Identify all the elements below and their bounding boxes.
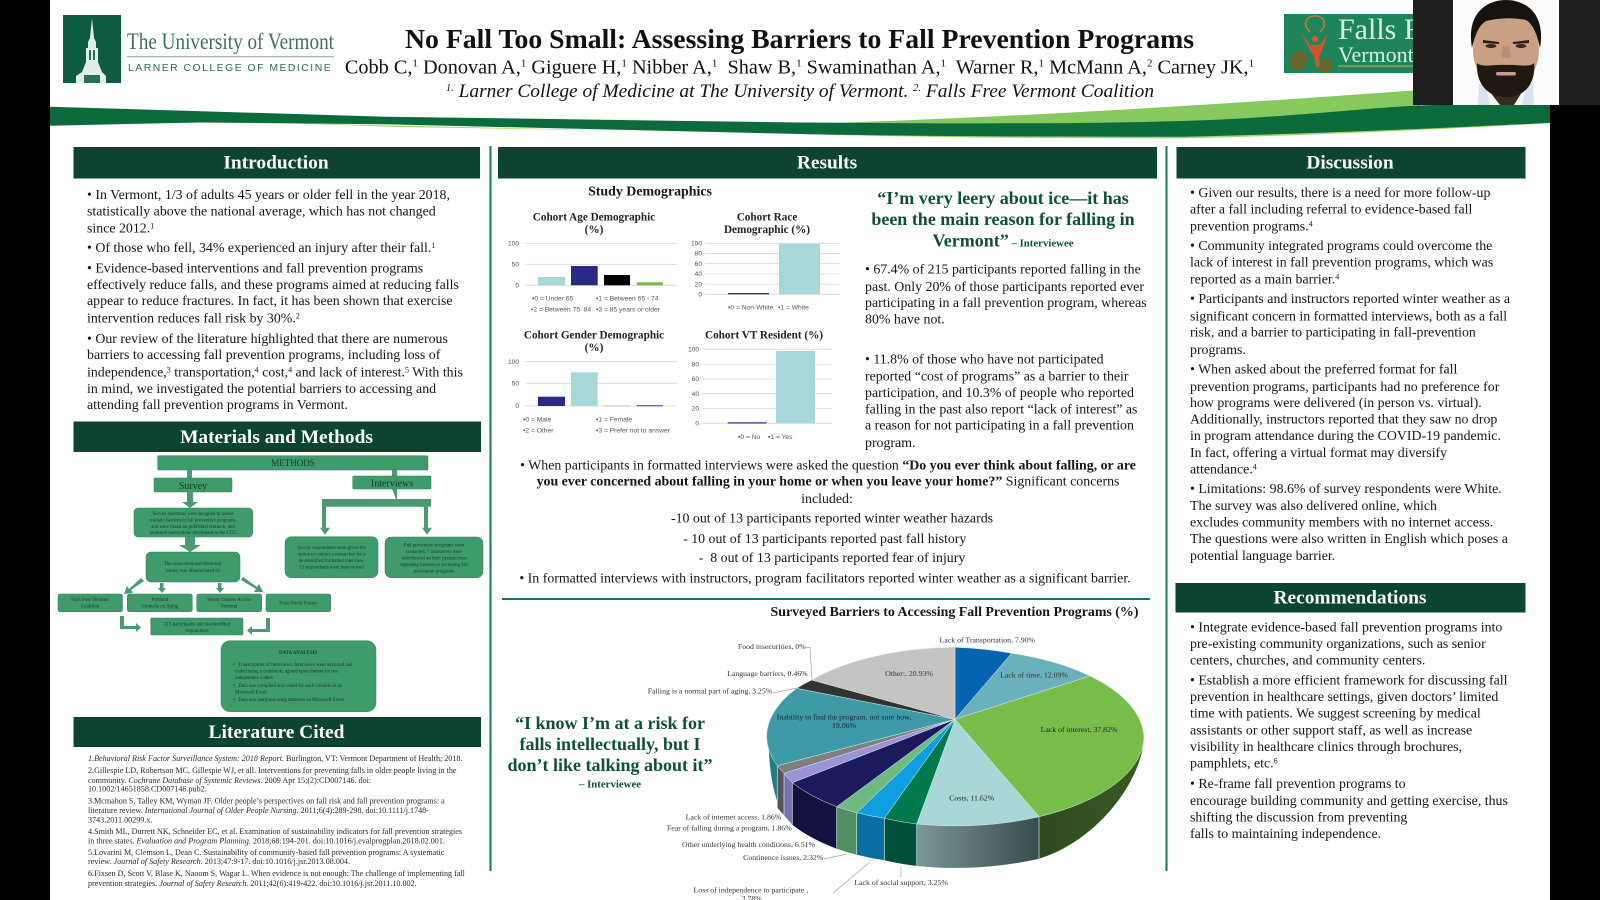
text block: references: in three states. Evaluation and Program Planning. 2018;68:194-201. doi:10.1016/j.evalprogplan.2018.02.001.: [88, 836, 445, 846]
chart: cohort race demographic: ▪1 = White: [778, 304, 809, 312]
text block: introduction: cost,: [259, 366, 288, 380]
authors: 1: [1249, 58, 1254, 70]
text block: recommendations: pre-existing community organizations, such as senior: [1190, 637, 1486, 652]
chart: cohort VT resident: [688, 330, 832, 441]
heading: results: [498, 147, 1157, 178]
text block: survey findings: past. Only 20% of those participants reported ever: [865, 280, 1144, 295]
flowchart: methods: Survey: [179, 481, 207, 492]
flowchart: methods: Fall prevention programs were: [404, 544, 464, 548]
pie labels: Lack of interest, 37.82%: [1041, 725, 1118, 734]
text block: discussion: [1190, 186, 1510, 564]
text block: survey findings: a reason for not participating in a fall prevention: [865, 419, 1134, 434]
text block: discussion: potential language barrier.: [1190, 549, 1335, 564]
flowchart: methods: • Data was analyzed using statistics on Microsoft Excel: [233, 698, 345, 703]
flowchart: methods: DATA ANALYSIS: [279, 651, 317, 656]
heading: results: Results: [797, 152, 858, 174]
chart: cohort race demographic: Cohort Race: [737, 212, 797, 224]
callout: intellectual risk quote: [507, 713, 713, 790]
authors: 1: [796, 58, 802, 70]
chart: cohort race demographic: Demographic (%): [724, 224, 810, 236]
text block: recommendations: 6: [1274, 756, 1278, 765]
authors: 1: [412, 58, 418, 70]
chart: cohort age demographic: 0: [515, 282, 519, 290]
text block: survey findings: • 67.4% of 215 participants reported falling in the: [865, 262, 1141, 278]
flowchart: methods: de-identified formatted interview.: [299, 559, 364, 564]
text block: introduction: in mind, we investigated the potential barriers to accessing and: [87, 382, 436, 397]
chart: cohort age demographic: (%): [585, 224, 604, 236]
text block: references: 3.Mcmahon S, Talley KM, Wyman JF. Older people’s perspectives on fall risk and fall prevention programs: a: [88, 796, 445, 806]
text block: discussion: programs.: [1190, 343, 1246, 358]
text block: discussion: The survey was also delivered online, which: [1190, 499, 1437, 514]
text block: introduction: 5: [405, 366, 409, 374]
chart: cohort race demographic: 20: [695, 281, 702, 288]
chart: cohort race demographic: 80: [695, 251, 702, 258]
pie side walls: [767, 737, 1144, 868]
text block: formatted interviews: -10 out of 13 participants reported winter weather hazards: [671, 511, 993, 526]
affiliations: Falls Free Vermont Coalition: [921, 81, 1154, 102]
affiliations: 1.: [446, 83, 454, 94]
chart: cohort VT resident: 40: [692, 391, 699, 398]
text block: survey findings: program.: [865, 436, 915, 451]
flowchart: methods: Portland: [152, 598, 169, 603]
webcam overlay: presenter photo: [1413, 0, 1600, 105]
chart: cohort age demographic: ▪1 = Between 65 - 74: [596, 296, 659, 302]
pie labels: Lack of time, 12.09%: [1000, 670, 1068, 680]
text block: discussion: significant concern in formatted interviews, both as a fall: [1190, 309, 1507, 324]
text block: references: community. Cochrane Database of Systemic Reviews. 2009 Apr 15;(2):CD007146. doi:: [88, 776, 371, 785]
chart: cohort VT resident: 0: [695, 420, 699, 428]
chart: cohort age demographic: 100: [508, 240, 519, 248]
heading: introduction: [74, 147, 480, 178]
pie labels: Other:, 20.93%: [885, 669, 933, 678]
callout: ice quote: been the main reason for falling in: [871, 209, 1135, 229]
text block: introduction: • In Vermont, 1/3 of adults 45 years or older fell in the year 2018,: [87, 188, 450, 203]
flowchart: methods: Vermont: [221, 604, 238, 610]
text block: discussion: • Limitations: 98.6% of survey respondents were White.: [1190, 482, 1502, 497]
authors: Swaminathan A,: [802, 56, 941, 78]
text block: formatted interviews: - 10 out of 13 participants reported past fall history: [680, 532, 966, 547]
flowchart: methods: interviewed on their perspectives: [402, 556, 466, 562]
text block: discussion: how programs were delivered (in person vs. virtual).: [1190, 396, 1482, 411]
text block: introduction: • Evidence-based interventions and fall prevention programs: [87, 261, 423, 276]
text block: recommendations: encourage building community and getting exercise, thus: [1190, 794, 1508, 809]
callout: intellectual risk quote: – Interviewee: [578, 778, 641, 790]
heading: literature cited: [74, 717, 481, 747]
text block: survey findings: falling in the past also report “lack of interest” as: [865, 402, 1137, 417]
authors: Warner R,: [946, 56, 1038, 78]
text block: introduction: [87, 188, 463, 413]
chart: cohort age demographic: ▪2 = Between 75 84: [531, 306, 591, 314]
authors: Giguere H,: [526, 56, 621, 78]
text block: introduction: 1: [150, 222, 154, 231]
text block: discussion: • When asked about the preferred format for fall: [1190, 362, 1457, 378]
chart: cohort race demographic: [691, 212, 840, 312]
heading: recommendations: Recommendations: [1274, 588, 1427, 608]
text block: introduction: intervention reduces fall risk by 30%.: [87, 311, 296, 326]
text block: references: prevention strategies. Journal of Safety Research. 2011;42(6):419-422. doi:10.1016/j.jsr.2011.10.002.: [88, 879, 417, 888]
text block: recommendations: shifting the discussion from preventing: [1190, 810, 1407, 825]
authors: McMann A,: [1044, 56, 1147, 78]
flowchart: methods: pretested instructions distributed to the CCC: [149, 531, 237, 536]
text block: formatted interviews: you ever concerned about falling in your home or when you leave your home?” Significant concerns: [537, 475, 1119, 490]
chart: cohort gender demographic: (%): [585, 342, 604, 354]
chart: cohort gender demographic: 50: [512, 380, 519, 388]
text block: introduction: • Our review of the literature highlighted that there are numerous: [87, 332, 448, 347]
heading: materials and methods: Materials and Methods: [180, 427, 373, 448]
text block: discussion: prevention programs, participants had no preference for: [1190, 380, 1500, 395]
chart: cohort race demographic: ▪0 = Non-White: [728, 304, 774, 312]
authors: Cobb C,: [345, 56, 412, 78]
flowchart: methods: 215 participants and de-identified: [164, 622, 230, 628]
text block: discussion: 4: [1309, 220, 1313, 229]
text block: references: 1.Behavioral Risk Factor Surveillance System: 2018 Report. Burlington, VT: Vermont Department of Health; 2018.: [88, 754, 462, 763]
text block: discussion: reported as a main barrier.: [1190, 273, 1335, 288]
chart: cohort race demographic: 40: [695, 271, 702, 278]
text block: discussion: 4: [1253, 462, 1257, 472]
text block: recommendations: [1190, 621, 1508, 842]
text block: references: 5.Lovarini M, Clemson L, Dean C. Sustainability of community-based fall prevention programs: A systematic: [88, 848, 445, 857]
heading: literature cited: Literature Cited: [209, 722, 345, 743]
callout: ice quote: “I’m very leery about ice—it has: [877, 188, 1129, 208]
text block: introduction: barriers to accessing fall prevention programs, including loss of: [87, 348, 441, 363]
heading: recommendations: [1176, 583, 1526, 612]
flowchart: methods: Survey respondents were given the: [297, 546, 366, 551]
authors: 1: [521, 58, 526, 70]
panel: results: [498, 147, 1157, 900]
chart: cohort VT resident: ▪1 = Yes: [768, 434, 793, 441]
flowchart: methods: [58, 456, 483, 712]
pie labels: Continence issues, 2.32%: [743, 853, 824, 862]
panel: introduction: [74, 147, 480, 413]
chart: cohort gender demographic: Cohort Gender Demographic: [524, 330, 664, 342]
text block: introduction: and lack of interest.: [292, 366, 405, 380]
flowchart: methods: Councils on Aging: [142, 604, 179, 610]
heading: discussion: [1176, 147, 1526, 178]
column dividers: [490, 146, 1168, 871]
text block: recommendations: prevention in healthcare settings, given doctors’ limited: [1190, 690, 1498, 705]
chart: cohort VT resident: 80: [692, 361, 699, 368]
chart: cohort age demographic: 50: [512, 262, 519, 268]
chart: cohort VT resident: ▪0 = No: [738, 434, 761, 441]
chart: cohort age demographic: [508, 212, 677, 314]
callout: intellectual risk quote: “I know I’m at a risk for: [515, 713, 705, 733]
text block: references: 10.1002/14651858.CD007146.pub2.: [88, 784, 207, 794]
pie labels: Food insecurities, 0%: [738, 642, 806, 651]
text block: references: 2.Gillespie LD, Robertson MC, Gillespie WJ, et all. Interventions for preventing falls in older people living in the: [88, 766, 457, 775]
heading: study demographics: Study Demographics: [588, 184, 713, 200]
authors: 1: [712, 58, 717, 70]
text block: introduction: attending fall prevention programs in Vermont.: [87, 398, 348, 413]
flowchart: methods: • Data was compiled and coded for each variable in an: [233, 684, 343, 689]
text block: introduction: since 2012.: [87, 222, 150, 237]
header swoosh: [50, 90, 1550, 138]
flowchart: methods: Interviews: [371, 478, 413, 490]
authors: 1: [1038, 58, 1044, 70]
text block: references: 3743.2011.00299.x.: [88, 816, 152, 824]
flowchart: methods: • Transcription of Interviews: Interviews were analyzed and: [233, 663, 353, 668]
text block: introduction: independence,: [87, 366, 167, 380]
text block: references: 4.Smith ML, Durrett NK, Schneider EC, et al. Examination of sustainability indicators for fall prevention strategies: [88, 827, 462, 836]
text block: introduction: transportation,: [171, 366, 255, 380]
pie labels: Lack of internet access, 1.86%: [686, 812, 782, 822]
pie labels: Lack of Transportation, 7.90%: [940, 636, 1036, 644]
text block: discussion: attendance.: [1190, 462, 1253, 478]
panel: materials and methods: [58, 422, 483, 712]
text block: discussion: The questions were also written in English which poses a: [1190, 532, 1508, 547]
text block: recommendations: • Establish a more efficient framework for discussing fall: [1190, 674, 1508, 689]
heading: discussion: Discussion: [1306, 152, 1394, 174]
text block: discussion: • Participants and instructors reported winter weather as a: [1190, 292, 1510, 307]
text block: formatted interviews: - 8 out of 13 participants reported fear of injury: [699, 551, 965, 566]
text block: survey findings: • 11.8% of those who have not participated: [865, 352, 1104, 367]
text block: recommendations: falls to maintaining independence.: [1190, 827, 1381, 842]
text block: discussion: • Given our results, there is a need for more follow-up: [1190, 186, 1490, 201]
text block: recommendations: • Integrate evidence-based fall prevention programs into: [1190, 621, 1502, 636]
text block: survey findings: 80% have not.: [865, 312, 945, 328]
chart: cohort race demographic: 60: [695, 261, 702, 268]
text block: discussion: prevention programs.: [1190, 220, 1309, 235]
callout: ice quote: Vermont” – Interviewee: [932, 230, 1074, 250]
flowchart: methods: coded using a codebook; agreed upon themes by two: [235, 670, 339, 674]
chart: cohort age demographic: Cohort Age Demographic: [533, 212, 655, 224]
flowchart: methods: regarding barriers to accessing fall: [400, 563, 468, 568]
pie labels: Costs, 11.62%: [949, 794, 995, 802]
text block: discussion: • Community integrated programs could overcome the: [1190, 239, 1492, 254]
text block: introduction: appear to reduce fractures. In fact, it has been shown that exercise: [87, 294, 453, 309]
panel: discussion: [1176, 147, 1526, 564]
text block: survey findings: participating in a fall prevention program, whereas: [865, 296, 1147, 311]
chart: cohort VT resident: 60: [692, 376, 699, 383]
pie labels: Falling is a normal part of aging, 3.25%: [648, 686, 773, 696]
text block: references: [88, 754, 466, 888]
chart: cohort VT resident: 20: [692, 406, 699, 413]
text block: formatted interviews: included:: [801, 492, 853, 507]
pie labels: 19.06%: [832, 721, 857, 730]
pie labels: Loss of independence to participate ,: [694, 886, 808, 894]
flowchart: methods: Coalition: [81, 604, 100, 610]
text block: discussion: lack of interest in fall prevention programs, which was: [1190, 255, 1493, 270]
chart: cohort gender demographic: 0: [515, 403, 519, 410]
heading: pie chart title: Surveyed Barriers to Accessing Fall Prevention Programs (%): [771, 605, 1139, 620]
chart: cohort age demographic: ▪3 = 85 years or older: [596, 306, 661, 314]
text block: introduction: 3: [167, 366, 171, 374]
chart: cohort VT resident: Cohort VT Resident (%): [705, 330, 823, 342]
logo: University of Vermont: [63, 15, 335, 83]
flowchart: methods: Survey questions were designed to assess: [152, 512, 234, 517]
pie labels: Lack of social support, 3.25%: [854, 878, 948, 887]
text block: discussion: Additionally, instructors reported that they saw no drop: [1190, 412, 1497, 428]
affiliations: Larner College of Medicine at The University of Vermont.: [454, 81, 913, 102]
flowchart: methods: METHODS: [271, 458, 315, 468]
flowchart: methods: respondents: [185, 629, 209, 634]
text block: formatted interviews: • In formatted interviews with instructors, program facilitators reported winter weather as a significant barrier.: [519, 572, 1131, 587]
text block: survey findings: reported “cost of programs” as a barrier to their: [865, 370, 1129, 385]
text block: discussion: In fact, offering a virtual format may diversify: [1190, 446, 1447, 461]
flowchart: methods: survey was disseminated to:: [165, 569, 221, 574]
authors: 2: [1147, 58, 1152, 70]
text block: introduction: effectively reduce falls, and these programs aimed at reducing falls: [87, 278, 459, 293]
text block: discussion: excludes community members with no internet access.: [1190, 516, 1493, 530]
chart: cohort gender demographic: 100: [508, 359, 519, 366]
text block: formatted interviews: [519, 458, 1136, 587]
callout: intellectual risk quote: falls intellectually, but I: [519, 734, 701, 754]
chart: cohort gender demographic: ▪0 = Male: [523, 416, 551, 424]
pie slices: [767, 647, 1144, 826]
panel: recommendations: [1176, 583, 1526, 842]
chart: cohort gender demographic: ▪2 = Other: [523, 428, 554, 434]
flowchart: methods: independent coders: [235, 676, 273, 681]
chart: cohort race demographic: 100: [691, 240, 702, 248]
pie leader lines: [773, 648, 901, 893]
text block: recommendations: assistants or other support staff, as well as increase: [1190, 724, 1472, 739]
callout: ice quote: [871, 188, 1135, 250]
title: No Fall Too Small: Assessing Barriers to Fall Prevention Programs: [405, 24, 1194, 55]
flowchart: methods: realistic barriers to fall prevention programs,: [149, 518, 237, 524]
text block: recommendations: pamphlets, etc.: [1190, 756, 1274, 771]
authors: Shaw B,: [717, 56, 796, 78]
authors: Donovan A,: [418, 56, 521, 78]
text block: introduction: 1: [431, 241, 435, 250]
text block: introduction: With this: [409, 366, 463, 380]
chart: cohort gender demographic: ▪3 = Prefer not to answer: [596, 428, 671, 434]
logo: Falls Free Vermont: Vermont: [1338, 42, 1414, 67]
chart: cohort gender demographic: [508, 330, 677, 434]
flowchart: methods: Senior Centers Across: [207, 598, 251, 603]
pie chart: surveyed barriers: [648, 636, 1144, 900]
pie labels: Language barriers, 0.46%: [727, 669, 808, 678]
panel: literature cited: [74, 717, 481, 888]
text block: references: literature review. International Journal of Older People Nursing. 2011;6(4):289-298. doi:10.1111/j.1748-: [88, 806, 429, 815]
flowchart: methods: prevention programs: [414, 570, 454, 574]
callout: intellectual risk quote: don’t like talking about it”: [507, 755, 713, 775]
text block: discussion: 4: [1335, 273, 1339, 282]
affiliations: 2.: [913, 83, 921, 94]
chart: cohort age demographic: ▪0 = Under 65: [532, 296, 574, 302]
text block: formatted interviews: • When participants in formatted interviews were asked the question “Do you ever think about falling, or are: [520, 458, 1136, 473]
flowchart: methods: The cross-sectional electronic: [164, 562, 223, 567]
text block: recommendations: centers, churches, and community centers.: [1190, 653, 1425, 668]
text block: introduction: 4: [255, 366, 259, 374]
text block: introduction: statistically above the national average, which has not changed: [87, 204, 436, 219]
authors: 1: [621, 58, 627, 70]
pie labels: Fear of falling during a program, 1.86%: [667, 824, 792, 832]
text block: survey findings: [865, 262, 1147, 451]
logo: Falls Free Vermont: [1284, 13, 1457, 73]
flowchart: methods: Falls Free Vermont: [71, 598, 109, 603]
authors: Carney JK,: [1152, 56, 1249, 78]
chart: cohort race demographic: 0: [698, 292, 702, 298]
flowchart: methods: option to contact a researcher for a: [298, 552, 366, 558]
flowchart: methods: 13 respondents were interviewed: [299, 566, 364, 570]
text block: introduction: • Of those who fell, 34% experienced an injury after their fall.: [87, 241, 431, 256]
text block: survey findings: participation, and 10.3% of people who reported: [865, 386, 1134, 401]
text block: discussion: risk, and a barrier to participating in fall-prevention: [1190, 326, 1476, 341]
chart: cohort VT resident: 100: [688, 346, 699, 354]
text block: references: review. Journal of Safety Research. 2013;47:9-17. doi:10.1016/j.jsr.2013.08.004.: [88, 857, 350, 866]
pie labels: [648, 636, 1118, 900]
text block: recommendations: time with patients. We suggest screening by medical: [1190, 706, 1481, 721]
text block: discussion: after a fall including referral to evidence-based fall: [1190, 202, 1473, 217]
flowchart: methods: Front Porch Forum: [279, 602, 317, 606]
flowchart: methods: contacted. 7 instructors were: [406, 550, 462, 555]
pie labels: Inability to find the program, not sure how,: [777, 712, 911, 722]
heading: materials and methods: [74, 422, 481, 452]
pie labels: Other underlying health conditions, 6.51%: [682, 840, 815, 849]
text block: recommendations: • Re-frame fall prevention programs to: [1190, 777, 1406, 792]
logo: University of Vermont: LARNER COLLEGE OF MEDICINE: [128, 63, 332, 74]
chart: cohort gender demographic: ▪1 = Female: [596, 416, 632, 424]
authors: 1: [941, 58, 946, 70]
logo: Falls Free Vermont: Falls Free: [1338, 13, 1457, 46]
logo: University of Vermont: The University of Vermont: [127, 29, 335, 54]
text block: references: 6.Fixsen D, Scott V, Blase K, Naoom S, Wagar L. When evidence is not enough: The challenge of implementing fall: [88, 869, 466, 878]
flowchart: methods: and were based on published research, and: [151, 525, 235, 530]
heading: introduction: Introduction: [223, 152, 329, 174]
text block: recommendations: visibility in healthcare clinics through brochures,: [1190, 740, 1462, 755]
text block: introduction: 2: [296, 311, 300, 320]
text block: discussion: in program attendance during the COVID-19 pandemic.: [1190, 429, 1501, 444]
flowchart: methods: Microsoft Excel: [235, 690, 267, 696]
authors: Nibber A,: [627, 56, 712, 78]
text block: introduction: 4: [288, 366, 292, 374]
